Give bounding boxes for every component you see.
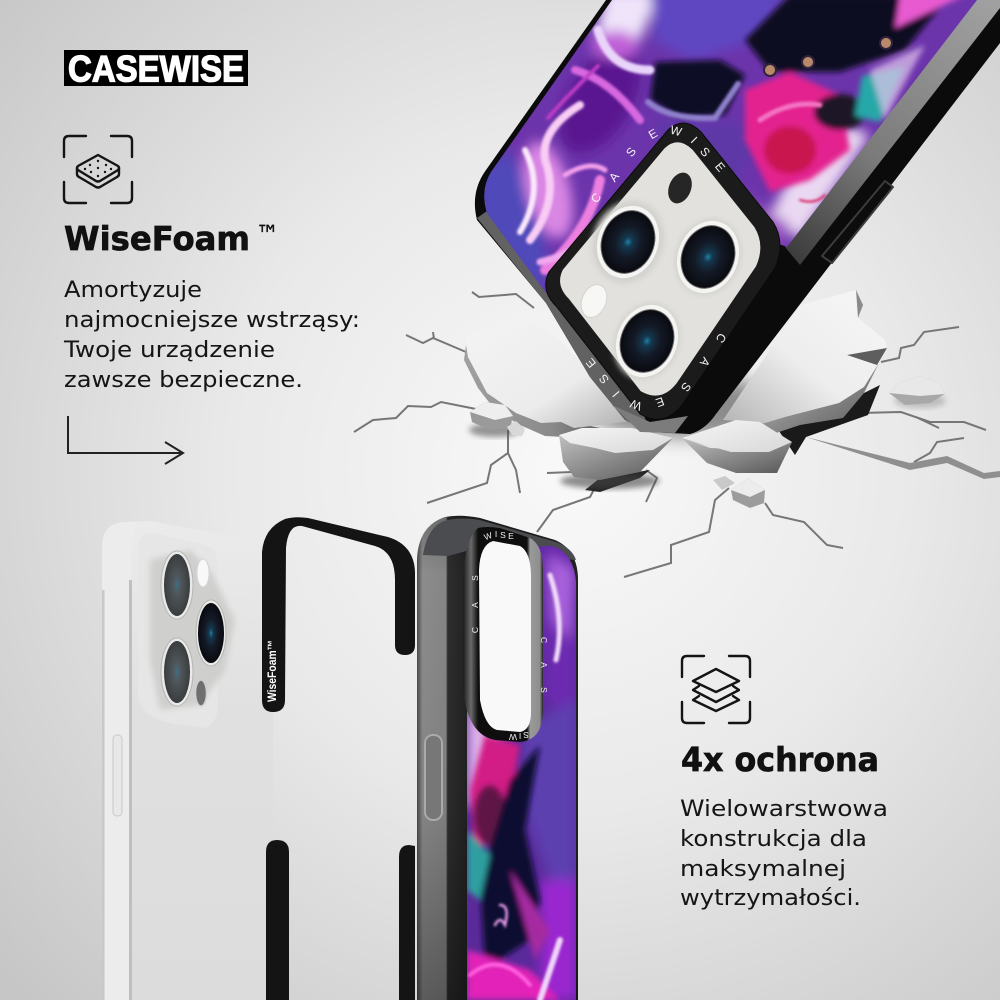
left slab bbox=[466, 318, 640, 428]
dark gap right bbox=[775, 385, 880, 455]
lower right strip bbox=[399, 845, 415, 1000]
ring lettering: A bbox=[606, 170, 622, 184]
lens 3 bbox=[603, 293, 691, 389]
arrow bbox=[68, 416, 183, 464]
sensor bbox=[196, 680, 206, 706]
side edge line bbox=[129, 580, 132, 1000]
bottom left chunk bbox=[559, 428, 673, 492]
lens 1 bbox=[161, 551, 193, 619]
rock under chunk bbox=[713, 476, 735, 490]
ring lettering: W bbox=[483, 530, 493, 542]
right slab dark notch bbox=[847, 348, 887, 365]
side button bbox=[425, 735, 442, 820]
logo: CASEWISE: CASEWISE bbox=[68, 48, 244, 90]
ring lettering: E bbox=[646, 126, 660, 142]
lower left strip bbox=[266, 840, 289, 1000]
lens housing bbox=[150, 550, 235, 710]
phone body bbox=[102, 521, 273, 1000]
heading: 4x ochrona: 4x ochrona bbox=[681, 740, 879, 779]
bare silver phone bbox=[102, 521, 273, 1000]
text block: WiseFoam description bbox=[63, 277, 360, 393]
ring lettering: C bbox=[588, 190, 604, 206]
dark sensor bbox=[664, 169, 696, 207]
icon: foam pad in viewfinder brackets bbox=[64, 136, 132, 203]
text block: 4x protection description bbox=[680, 796, 888, 911]
lens 3 bbox=[161, 638, 193, 706]
right rock bbox=[889, 376, 946, 408]
left slab side bbox=[464, 345, 610, 442]
ring lettering: I bbox=[610, 388, 622, 400]
trademark sign: ™ bbox=[256, 220, 279, 249]
flash bbox=[197, 559, 209, 587]
ring lettering: W bbox=[509, 732, 517, 742]
ribbon label: WiseFoam™ bbox=[265, 640, 279, 702]
left small rock bbox=[469, 402, 525, 437]
ring lettering: I bbox=[688, 134, 700, 146]
bottom right chunk bbox=[682, 420, 792, 473]
ring lettering: S bbox=[500, 530, 506, 540]
silver camera plateau bbox=[560, 142, 760, 396]
phone side band bbox=[102, 522, 138, 1000]
ring lettering: A bbox=[697, 355, 713, 369]
lens 2 bbox=[664, 209, 752, 305]
ring lettering: C bbox=[713, 330, 729, 346]
crack lines bbox=[354, 292, 1000, 577]
text block: 4x protection description: wytrzymałości. bbox=[680, 885, 861, 911]
case shading bbox=[417, 516, 578, 1000]
top phone in case bbox=[470, 0, 1000, 434]
artwork: purple, pink, navy bbox=[470, 0, 990, 300]
upper ribbon bbox=[262, 517, 415, 712]
ring lettering: S bbox=[697, 144, 713, 160]
ring lettering: E bbox=[654, 394, 666, 410]
ring lettering: A bbox=[470, 602, 480, 608]
case lower translucent corner bbox=[612, 405, 688, 433]
WiseFoam black ribbon bbox=[262, 517, 415, 1000]
shadow under phone bbox=[585, 378, 795, 438]
ring lettering: I bbox=[495, 529, 497, 539]
rock lower bbox=[731, 478, 765, 508]
wall cracks and broken chunks bbox=[354, 290, 1000, 577]
case side view bbox=[417, 516, 578, 1000]
ring lettering: C bbox=[539, 637, 549, 643]
ring lettering: I bbox=[519, 731, 521, 741]
left edge line bbox=[102, 590, 104, 1000]
right slab side bbox=[762, 363, 879, 435]
ring lettering: S bbox=[539, 687, 549, 693]
camera ring inner opening bbox=[479, 541, 531, 732]
text block: 4x protection description: Wielowarstwowa bbox=[680, 796, 888, 822]
top dark bevel bbox=[423, 518, 576, 560]
ring lettering: C bbox=[470, 627, 480, 633]
ring lettering: E bbox=[583, 355, 599, 371]
side button bbox=[113, 735, 122, 816]
camera ring bbox=[463, 527, 543, 742]
flash bbox=[577, 281, 611, 321]
right slab spike bbox=[856, 290, 863, 318]
side button bbox=[822, 181, 893, 263]
ring lettering: W bbox=[669, 123, 684, 139]
heading: WiseFoam: WiseFoam bbox=[64, 219, 250, 258]
lens 2 bbox=[196, 600, 226, 666]
icon: stacked layers in viewfinder brackets bbox=[682, 656, 750, 723]
text block: WiseFoam description: najmocniejsze wstrząsy: bbox=[64, 307, 360, 333]
ring lettering bbox=[470, 529, 549, 742]
text block: 4x protection description: konstrukcja dla bbox=[680, 826, 867, 852]
case rim, lower left bbox=[477, 211, 650, 431]
ring lettering bbox=[583, 123, 729, 414]
ring lettering: S bbox=[623, 145, 639, 159]
right slab bbox=[723, 290, 887, 423]
camera bump bbox=[138, 533, 218, 728]
camera island ring bbox=[546, 123, 780, 419]
artwork bbox=[467, 545, 577, 1000]
text block: 4x protection description: maksymalnej bbox=[680, 856, 846, 882]
case shell bbox=[475, 0, 1000, 434]
text block: WiseFoam description: zawsze bezpieczne. bbox=[64, 367, 303, 393]
text block: WiseFoam description: Twoje urządzenie bbox=[63, 337, 275, 363]
ring lettering: E bbox=[712, 159, 728, 175]
ring lettering: A bbox=[539, 662, 549, 668]
case side gray band bbox=[785, 0, 1000, 265]
ring lettering: S bbox=[470, 575, 480, 581]
ring lettering: E bbox=[508, 531, 514, 541]
case body bbox=[417, 516, 578, 1000]
lens 1 bbox=[580, 190, 676, 294]
text block: WiseFoam description: Amortyzuje bbox=[64, 277, 202, 303]
ring lettering: S bbox=[523, 730, 529, 740]
ring lettering: W bbox=[628, 396, 644, 414]
ring lettering: S bbox=[678, 380, 694, 394]
ring lettering: S bbox=[596, 371, 612, 387]
